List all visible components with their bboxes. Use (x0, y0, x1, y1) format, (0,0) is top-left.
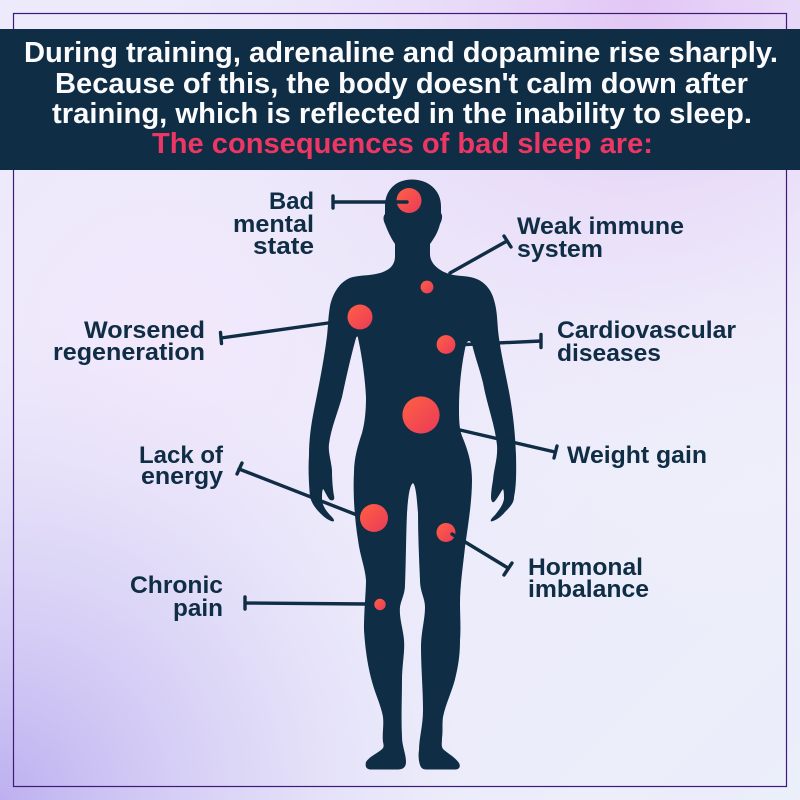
spot: head (396, 188, 422, 213)
label: weak immune system (517, 213, 684, 263)
spot: abdomen (402, 396, 440, 434)
label: worsened regeneration (53, 317, 205, 366)
label: cardiovascular diseases: Cardiovascular (557, 317, 736, 344)
label: chronic pain: pain (173, 595, 223, 622)
label: worsened regeneration: Worsened (84, 317, 205, 344)
connector: worsened regeneration (220, 323, 328, 344)
label: chronic pain: Chronic (130, 572, 223, 599)
spot: shoulder (348, 304, 372, 330)
connector: hormonal imbalance (452, 534, 512, 575)
label: worsened regeneration: regeneration (53, 339, 205, 366)
connector: weight gain (460, 430, 557, 458)
label: weak immune system: Weak immune (517, 213, 684, 240)
connector: bad mental state (333, 196, 407, 208)
label: hormonal imbalance (528, 554, 649, 603)
label: chronic pain (130, 572, 223, 622)
connector: weak immune system (450, 236, 511, 273)
label: weak immune system: system (517, 236, 603, 263)
header banner (0, 29, 800, 170)
spot: knee (374, 599, 386, 610)
label: cardiovascular diseases: diseases (557, 340, 661, 367)
body silhouette (309, 180, 516, 770)
connector: cardiovascular diseases (465, 334, 541, 348)
label: lack of energy: Lack of (139, 442, 224, 469)
spot: upper chest (421, 281, 433, 293)
spot: right thigh (436, 523, 456, 542)
hot spots (348, 188, 456, 610)
header text: training, which is reflected in the inability to sleep. (52, 98, 752, 130)
label: cardiovascular diseases (557, 317, 736, 367)
label: hormonal imbalance: Hormonal (528, 554, 643, 581)
label: bad mental state: state (253, 233, 314, 260)
label: lack of energy: energy (141, 463, 223, 490)
label: bad mental state: Bad (269, 188, 314, 215)
spot: left thigh (360, 504, 388, 532)
label: bad mental state (233, 188, 314, 260)
label: hormonal imbalance: imbalance (528, 576, 649, 603)
header text: During training, adrenaline and dopamine rise sharply. (24, 37, 778, 69)
label: lack of energy (139, 442, 224, 490)
connector: chronic pain (245, 597, 366, 609)
header text: The consequences of bad sleep are: (152, 128, 653, 160)
spot: heart side (437, 335, 455, 354)
header text (24, 37, 778, 160)
label: bad mental state: mental (233, 211, 314, 238)
label: weight gain: Weight gain (567, 442, 707, 469)
connector: lack of energy (237, 463, 357, 515)
header text: Because of this, the body doesn't calm down after (55, 68, 748, 100)
